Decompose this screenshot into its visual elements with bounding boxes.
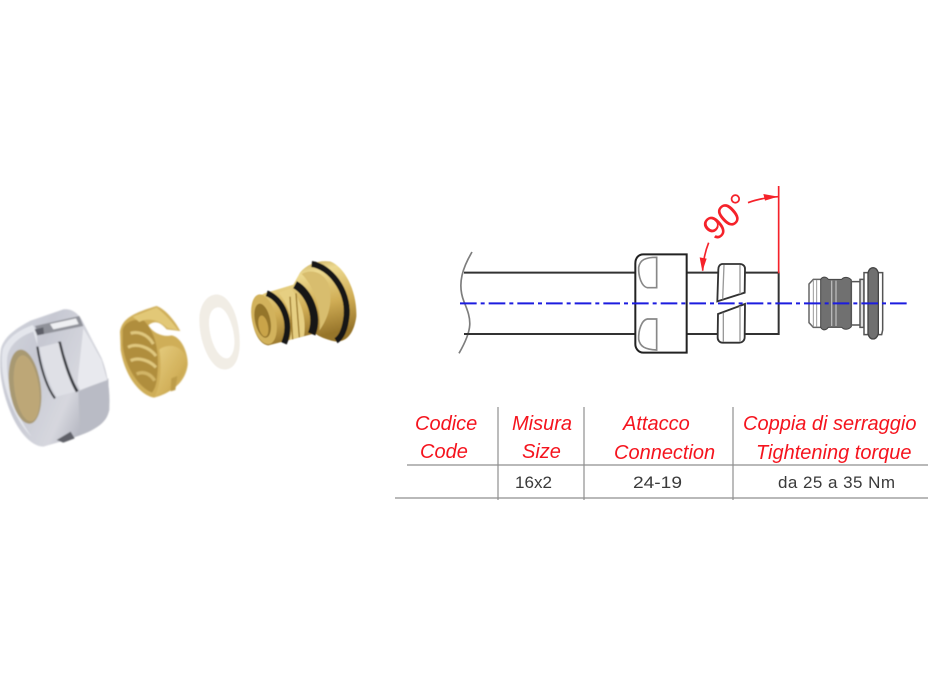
technical drawing: pipe, nut and adapter — [459, 186, 910, 353]
split ring upper — [717, 264, 745, 301]
pipe walls — [464, 273, 779, 334]
column header: connection: Attacco — [622, 413, 690, 435]
table values: 24-19 — [633, 473, 682, 492]
nut outline — [635, 254, 687, 353]
adapter drawing — [809, 268, 883, 339]
column header: size: Size — [522, 441, 561, 463]
column header: code: Codice — [415, 413, 477, 435]
column header: code — [415, 413, 477, 463]
pipe cut edge — [459, 252, 472, 353]
table values: da 25 a 35 Nm — [778, 473, 895, 492]
table values — [515, 473, 895, 492]
column header: size — [512, 413, 572, 463]
red angle mark 90 degrees — [696, 186, 779, 273]
column header: code: Code — [420, 441, 468, 463]
table: fitting specification — [395, 407, 928, 500]
brass adapter with O-rings — [247, 261, 356, 347]
table values: 16x2 — [515, 473, 552, 492]
white washer — [199, 295, 240, 369]
centre axis — [460, 300, 910, 306]
brass split ring — [120, 306, 188, 398]
column header: tightening torque: Tightening torque — [756, 442, 912, 464]
red angle mark 90 degrees: 90° — [696, 187, 758, 248]
split ring lower — [718, 304, 745, 343]
column header: connection: Connection — [614, 442, 715, 464]
nut flat details — [639, 257, 657, 350]
photo: exploded fitting parts — [0, 261, 356, 447]
chrome compression nut — [0, 309, 109, 447]
column header: tightening torque: Coppia di serraggio — [743, 413, 916, 435]
column header: tightening torque — [743, 413, 916, 464]
column header: size: Misura — [512, 413, 572, 435]
table grid — [395, 407, 928, 500]
column header: connection — [614, 413, 715, 464]
